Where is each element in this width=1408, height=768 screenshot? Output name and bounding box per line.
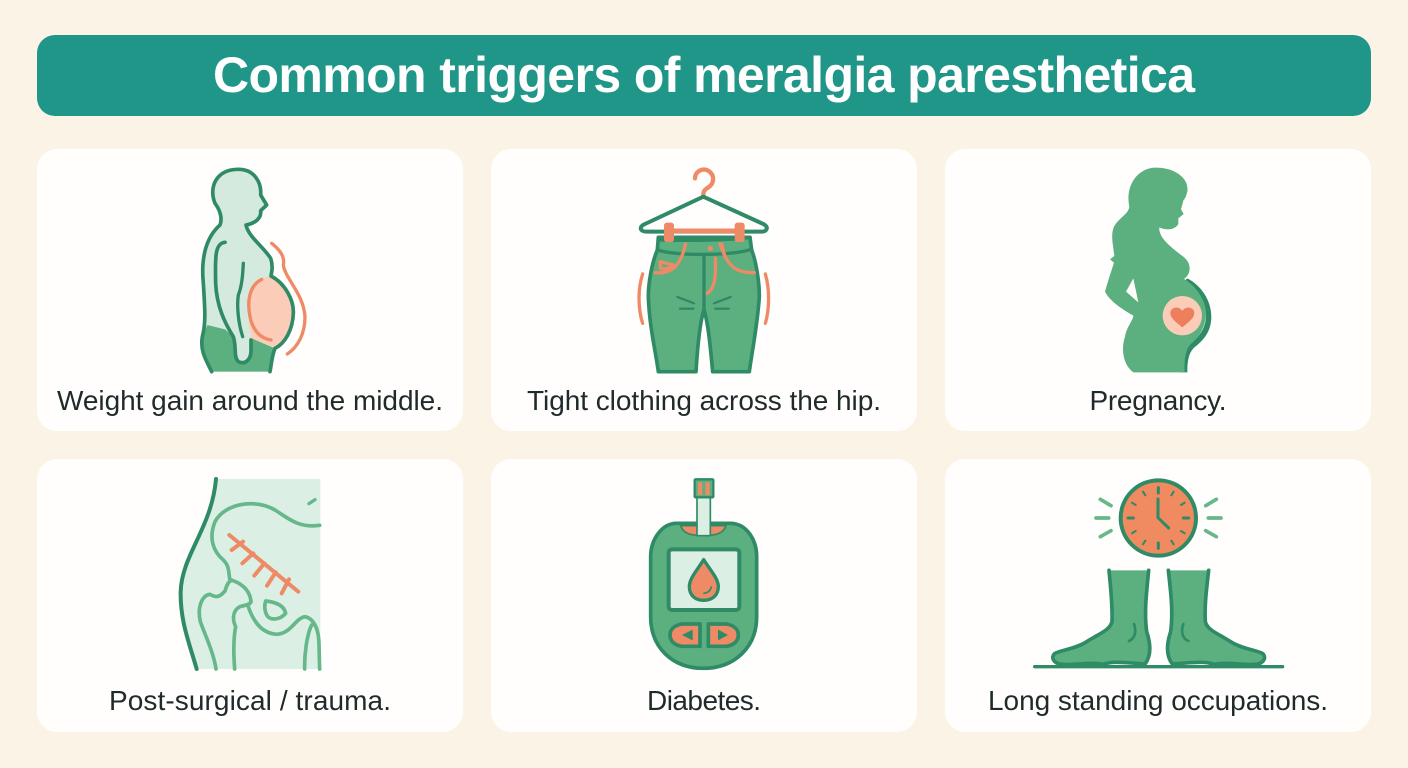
panel: diabetes [491,459,917,732]
title: Common triggers of meralgia paresthetica [213,47,1196,103]
title banner [37,35,1371,116]
panel: tight clothing [491,149,917,431]
label: Diabetes. [647,685,761,716]
icon: body with enlarged belly [202,169,305,372]
label: Post-surgical / trauma. [109,685,391,716]
icon: jeans on hanger [639,170,769,372]
label: Tight clothing across the hip. [527,385,881,416]
icon: clock and feet [1035,480,1283,667]
label: Long standing occupations. [988,685,1328,716]
label: Pregnancy. [1090,385,1226,416]
panel: post-surgical [37,459,463,732]
panel: weight gain [37,149,463,431]
icon: pregnant silhouette [1105,168,1211,372]
panel: long standing [945,459,1371,732]
label: Weight gain around the middle. [57,385,443,416]
panel: pregnancy [945,149,1371,431]
icon: hip anatomy with scar [181,479,320,669]
icon: glucose meter [651,479,757,668]
